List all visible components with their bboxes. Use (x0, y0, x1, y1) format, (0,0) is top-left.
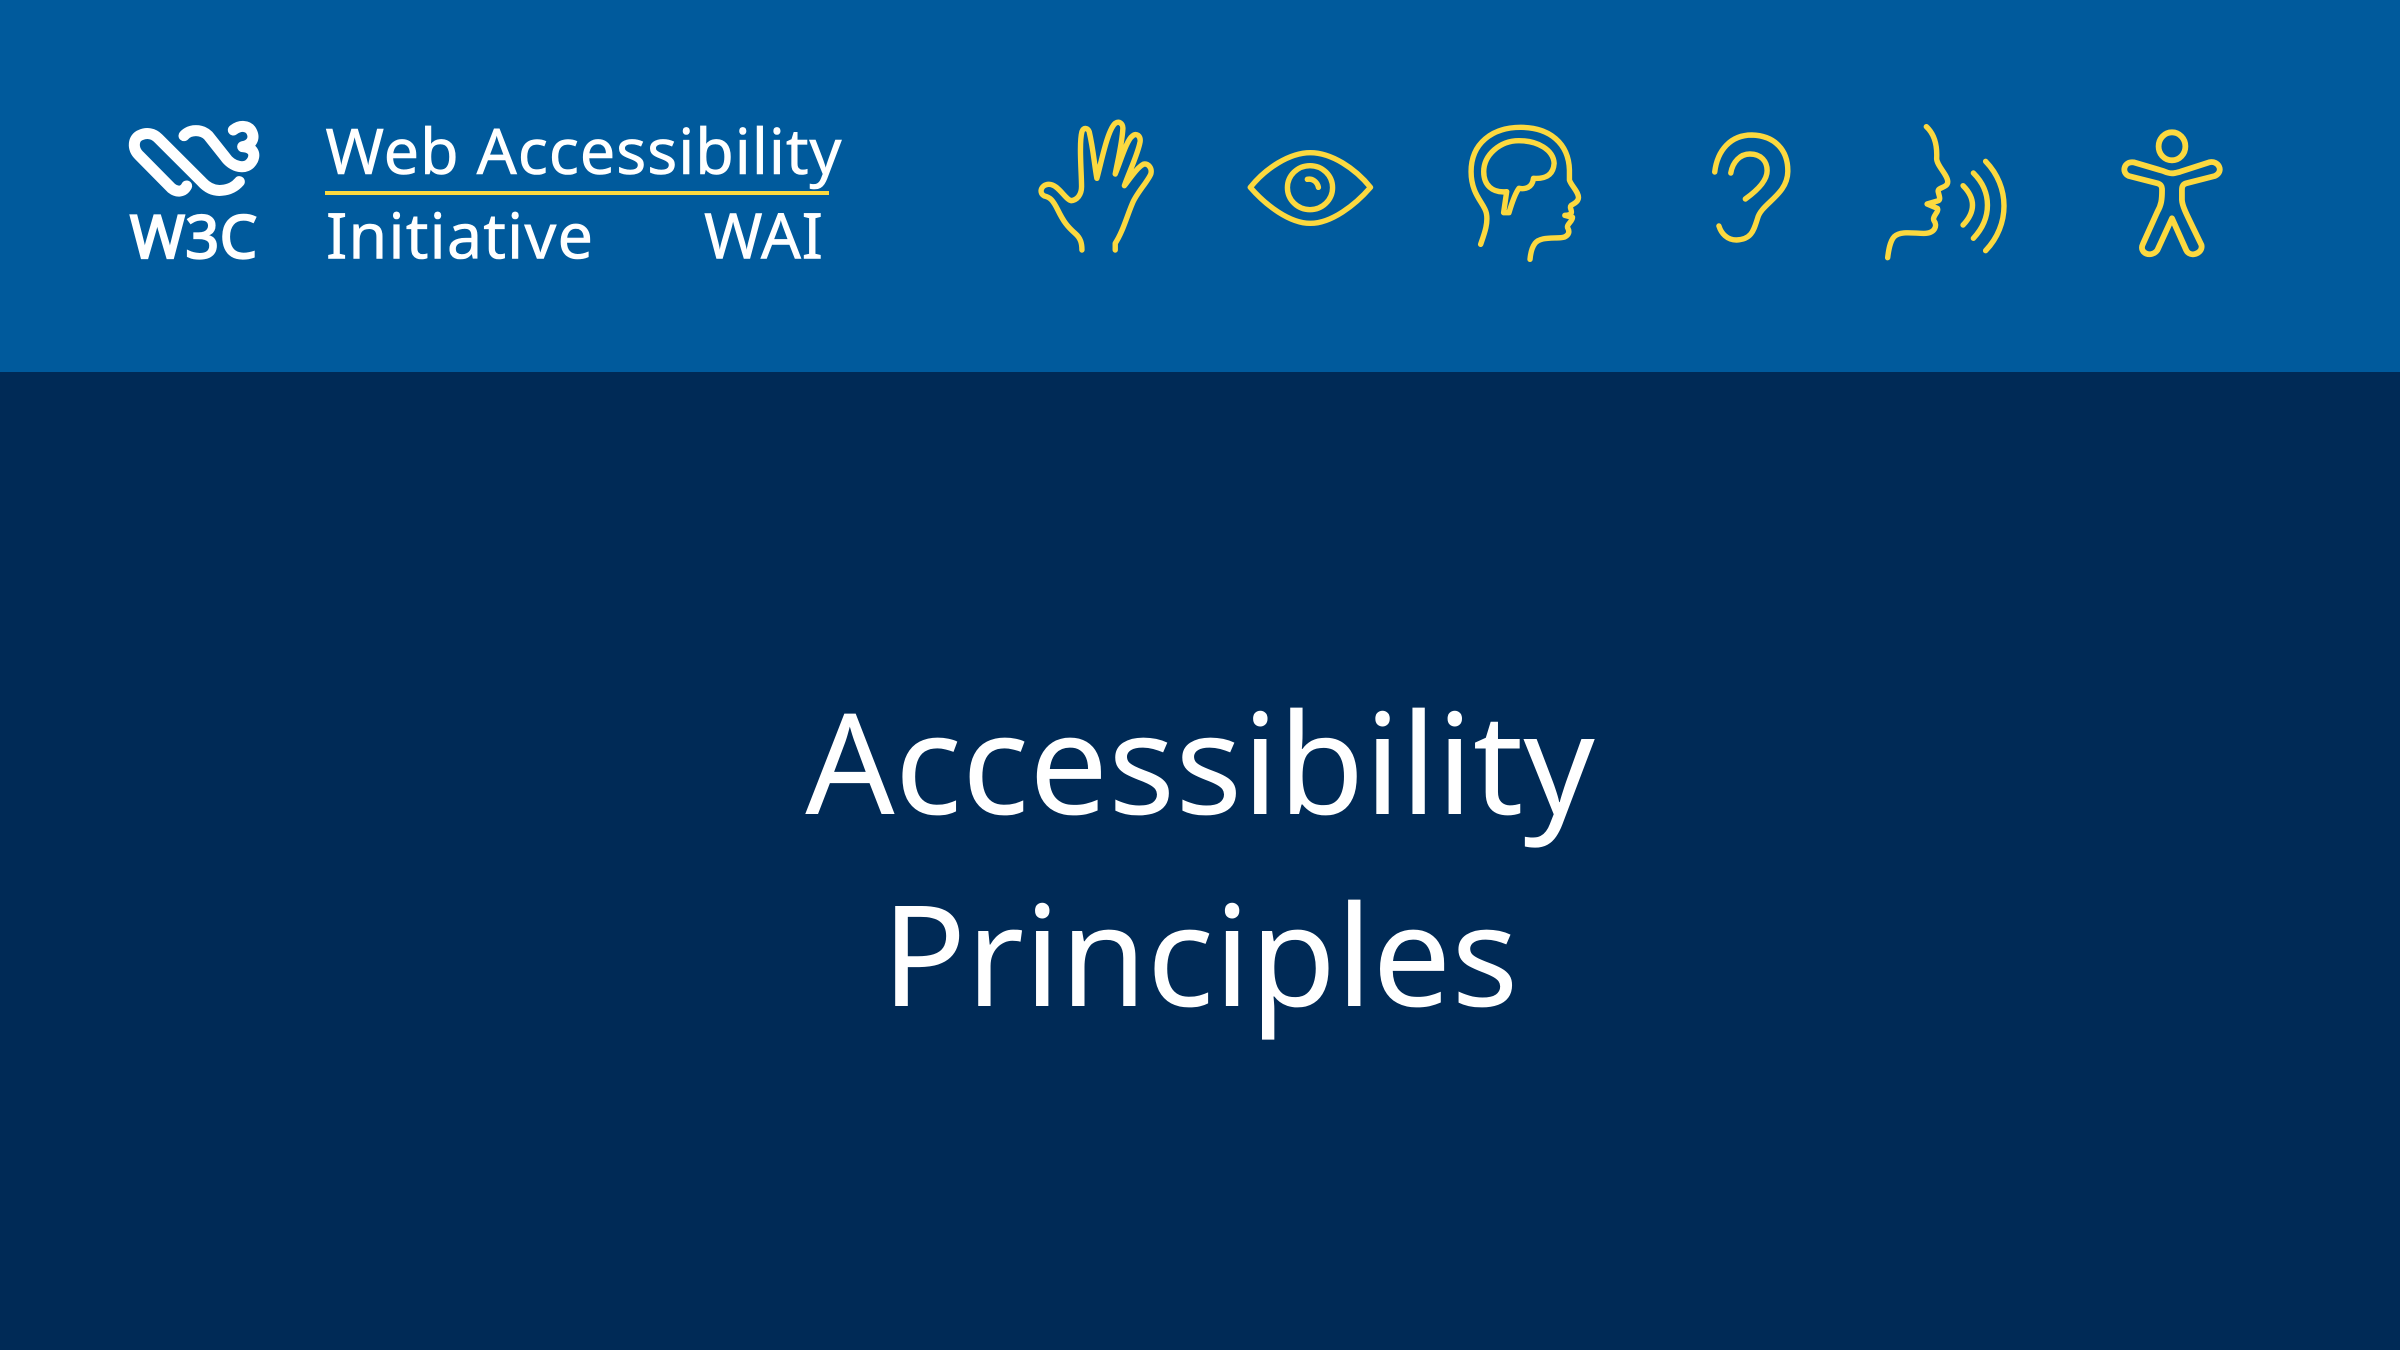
text: W3C wordmark: W3C (130, 196, 257, 276)
text: Principles: Principles (882, 857, 1518, 1048)
text: Web Accessibility: Web Accessibility (326, 108, 842, 193)
title (805, 665, 1595, 1048)
icon: accessibility figure (2124, 132, 2220, 254)
panel: header band (0, 0, 2400, 372)
panel: title background (0, 372, 2400, 1350)
text: WAI: WAI (704, 192, 823, 278)
icon: W3C mark (134, 126, 254, 191)
icon: speaking profile (1888, 127, 2004, 258)
heading: Web Accessibility Initiative (325, 108, 842, 278)
icon: hand (1041, 122, 1151, 250)
text: Initiative: Initiative (326, 192, 593, 278)
icon: ear (1715, 135, 1788, 240)
icon: head with brain (1471, 127, 1578, 259)
divider: logo underline (325, 191, 829, 195)
icon: eye (1250, 153, 1370, 223)
logo: W3C (130, 126, 257, 276)
text: Accessibility: Accessibility (805, 665, 1595, 856)
